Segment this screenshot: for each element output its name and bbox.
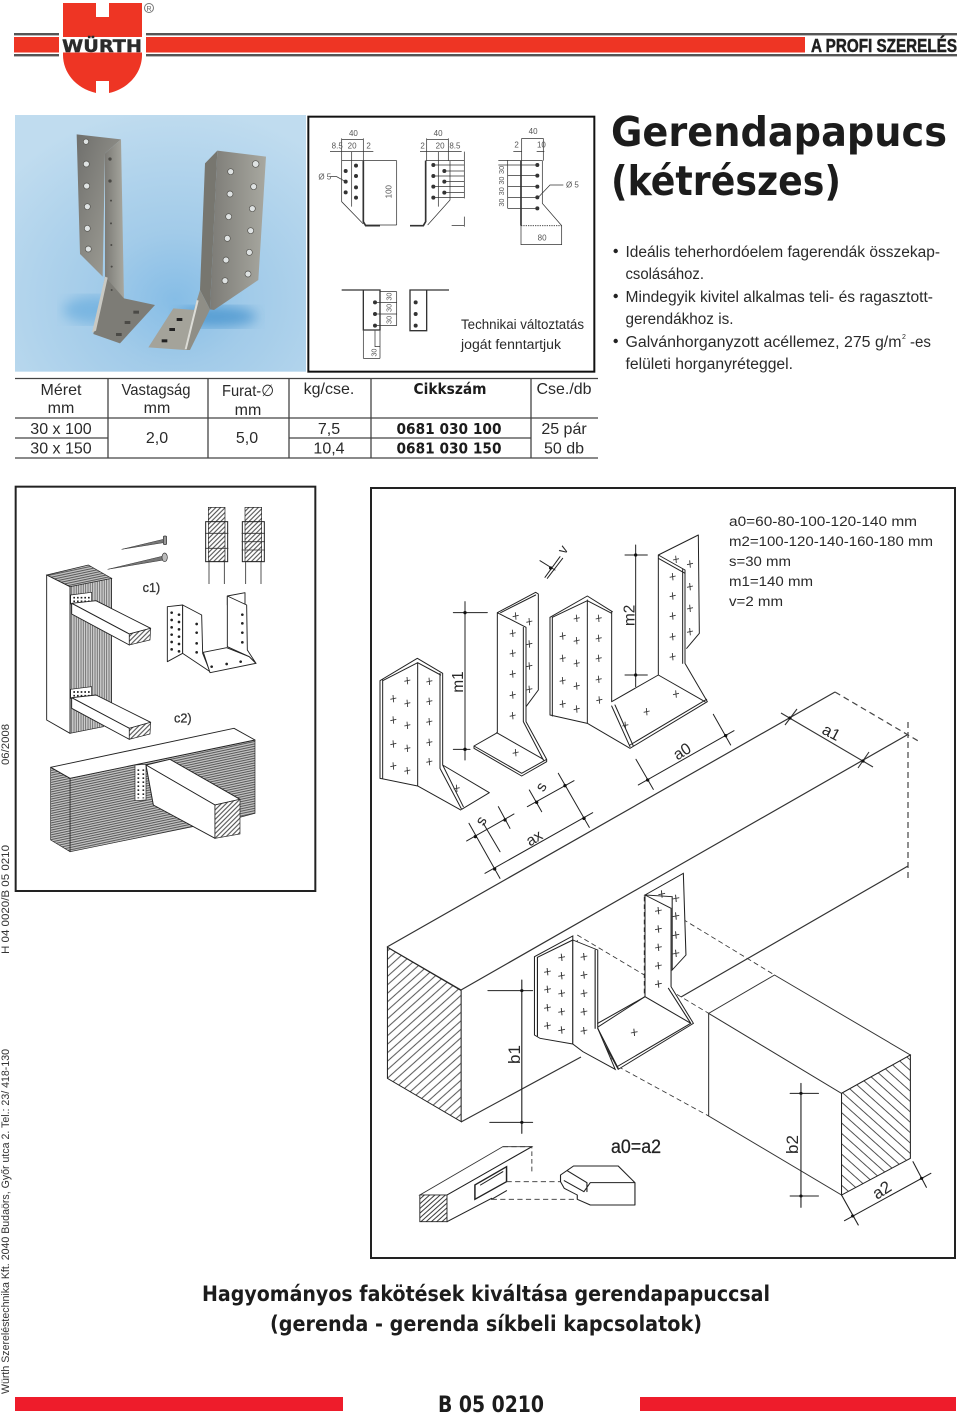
feature bullet list: Galvánhorganyzott acéllemez, 275 g/m	[626, 334, 902, 351]
logo: Würth shield: R	[146, 6, 152, 13]
product photo	[15, 115, 306, 372]
dimensioned view 4: 30	[384, 304, 393, 312]
table header: mm	[144, 400, 170, 417]
table header	[41, 380, 592, 419]
dimensioned view 1: 40	[349, 129, 358, 138]
technical drawing panel	[308, 117, 594, 372]
footer bars and code	[15, 1393, 956, 1417]
dimensioned view 4: 30	[369, 349, 378, 357]
hanger isometric	[167, 593, 256, 673]
dimensioned view 3: Ø 5	[566, 181, 579, 190]
table rows: 7,5	[318, 421, 340, 438]
main beam assembly drawing	[387, 692, 931, 1225]
bottom caption: Hagyományos fakötések kiváltása gerendapapuccsal	[202, 1282, 770, 1306]
dimensioned view 4	[342, 290, 397, 358]
label c1: c1)	[143, 581, 160, 595]
feature bullet list: csolásához.	[626, 266, 704, 283]
parameter list	[729, 514, 933, 609]
dimensioned view 1: 8.5	[332, 142, 343, 151]
assembly labels	[505, 1045, 895, 1203]
assembly labels: a2	[869, 1177, 895, 1203]
parameter list: s=30 mm	[729, 554, 791, 569]
vertical side imprint	[0, 724, 12, 1394]
dimension labels: m1	[450, 671, 467, 693]
dimensioned view 4: 30	[384, 293, 393, 301]
dimensioned view 3: 30	[497, 187, 506, 195]
dimensioned view 2: 2	[420, 142, 425, 151]
header bar with logo	[14, 3, 957, 93]
dimensioned view 3	[497, 127, 579, 245]
table rows: 30 x 150	[30, 440, 92, 458]
dimensioned view 1: 2	[366, 142, 371, 151]
dimensioned view 1: Ø 5	[318, 172, 332, 181]
label c2: c2)	[174, 712, 192, 726]
feature bullet list: 2	[902, 334, 906, 341]
dimensioned view 3: 30	[497, 199, 506, 207]
parameter list: v=2 mm	[729, 594, 783, 609]
logo: Würth shield: WÜRTH	[62, 35, 142, 57]
feature bullet list: Mindegyik kivitel alkalmas teli- és ragasztott-	[626, 289, 933, 306]
vertical side imprint: 06/2008	[0, 724, 12, 765]
dimensioned view 2: 8.5	[449, 142, 461, 151]
bottom caption	[202, 1282, 770, 1336]
assembly labels: b1	[505, 1045, 524, 1064]
table rows: 10,4	[313, 440, 345, 458]
feature bullet list: felületi horganyréteggel.	[626, 356, 793, 373]
dimensioned view 5	[410, 290, 449, 331]
note: technical changes: jogát fenntartjuk	[460, 337, 561, 352]
table header: kg/cse.	[304, 381, 354, 398]
dimensioned view 3: 30	[497, 166, 506, 174]
table rows: 50 db	[544, 440, 584, 458]
panel: mounting dimensions	[371, 488, 955, 1258]
title	[611, 108, 947, 205]
dimensioned view 2: 40	[434, 129, 443, 138]
dimension a1	[781, 709, 873, 768]
nails	[108, 536, 167, 569]
note: technical changes	[460, 317, 584, 352]
title: (kétrészes)	[611, 157, 841, 205]
table rows: 0681 030 100	[396, 420, 502, 438]
dimensioned view 1	[318, 129, 397, 226]
section views	[205, 507, 265, 584]
right beam	[709, 975, 910, 1195]
dimensioned view 3: 10	[537, 140, 546, 149]
feature bullet list	[614, 244, 940, 373]
feature bullet list: gerendákhoz is.	[626, 311, 734, 328]
middle hanger half	[474, 592, 547, 776]
table rows: 5,0	[236, 430, 258, 447]
dimensions b1 b2 a2	[488, 980, 931, 1225]
dimensioned view 4: 30	[384, 316, 393, 324]
installed hanger	[534, 873, 693, 1069]
dimension labels: s	[472, 813, 491, 829]
dimensioned view 1: 20	[348, 142, 357, 151]
parameter list: a0=60-80-100-120-140 mm	[729, 514, 917, 529]
parameter list: m2=100-120-140-160-180 mm	[729, 534, 933, 549]
dimension labels: a0	[670, 740, 695, 764]
dimensioned view 2	[410, 129, 464, 227]
table rows: 25 pár	[541, 421, 587, 438]
vertical side imprint: H 04 0020/B 05 0210	[0, 845, 12, 954]
panel: c1 c2 connection examples	[16, 487, 315, 891]
table rows: 2,0	[146, 430, 168, 447]
left beam hatched end	[387, 947, 461, 1122]
note: technical changes: Technikai változtatás	[461, 317, 584, 332]
left bracket	[77, 134, 155, 343]
left hanger half	[380, 658, 489, 810]
complete U hanger	[550, 535, 707, 748]
table header: Furat-∅	[222, 383, 274, 400]
table rows	[30, 420, 587, 458]
feature bullet list: -es	[910, 334, 931, 351]
dimension lines	[453, 545, 734, 878]
column with two beams	[47, 565, 151, 739]
dimension labels: ax	[523, 827, 546, 850]
logo: Würth shield	[59, 3, 154, 93]
parameter list: m1=140 mm	[729, 574, 813, 589]
beam to beam joint	[51, 728, 255, 852]
table header: Méret	[41, 382, 82, 399]
beam edges	[387, 692, 908, 1122]
table rows: 0681 030 150	[396, 440, 502, 458]
table rows: 30 x 100	[30, 421, 92, 438]
dimensioned view 3: 2	[514, 140, 519, 149]
feature bullet list: Ideális teherhordóelem fagerendák összekap-	[626, 244, 940, 261]
dimensioned view 3: 40	[529, 127, 538, 136]
small tenon joint sketch	[420, 1147, 635, 1222]
dimensioned view 2: 20	[436, 142, 445, 151]
table header: mm	[48, 400, 74, 417]
dimension labels: v	[554, 542, 571, 557]
table header: Cikkszám	[414, 380, 486, 398]
vertical side imprint: Würth Szereléstechnika Kft. 2040 Budaörs, Győr utca 2. Tel.: 23/ 418-130	[0, 1049, 12, 1394]
assembly labels: a0=a2	[611, 1137, 661, 1158]
table header: Vastagság	[122, 382, 190, 399]
dimension labels: s	[532, 779, 551, 795]
assembly labels: b2	[783, 1135, 802, 1154]
upper hangers drawing	[380, 535, 734, 878]
dimension a1: a1	[819, 722, 843, 745]
right bracket	[148, 151, 266, 350]
table header: mm	[235, 402, 261, 419]
dimension labels: m2	[621, 605, 638, 626]
table header: Cse./db	[536, 381, 592, 398]
specification table	[15, 378, 598, 458]
dimensioned view 3: 30	[497, 177, 506, 185]
dimensioned view 1: 100	[385, 184, 394, 198]
dimensioned view 3: 80	[538, 234, 547, 243]
bottom caption: (gerenda - gerenda síkbeli kapcsolatok)	[270, 1312, 702, 1336]
hidden dashed lines	[577, 897, 775, 1116]
dimension labels	[450, 542, 695, 850]
red header stripe	[14, 37, 805, 52]
